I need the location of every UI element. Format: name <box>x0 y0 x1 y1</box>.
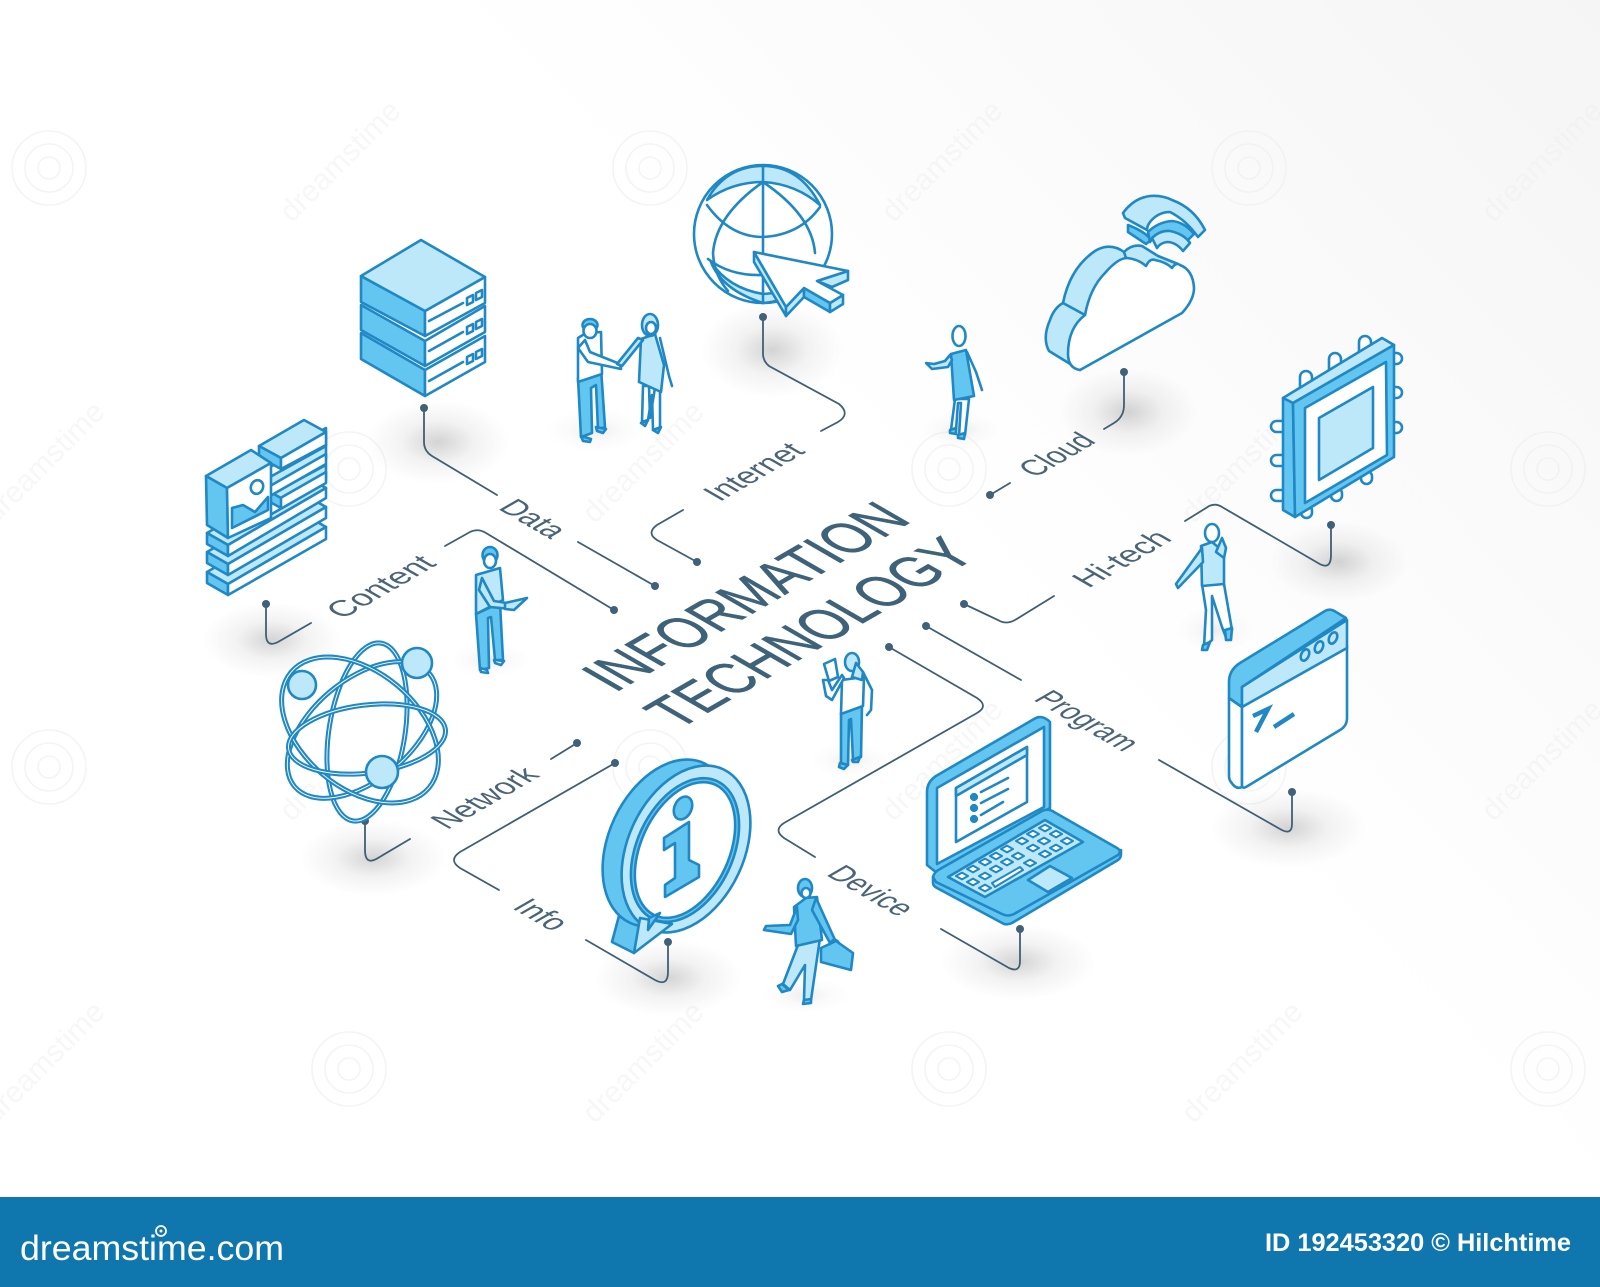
person: woman reading phone <box>823 653 872 769</box>
text: dreamstime <box>273 693 407 827</box>
picture block <box>206 450 271 538</box>
text: dreamstime <box>875 94 1009 228</box>
icon: network atom <box>254 628 466 832</box>
connector: Data <box>420 404 659 590</box>
text: dreamstime <box>875 693 1009 827</box>
connector: Hi-tech <box>960 505 1335 622</box>
wifi waves <box>1123 196 1205 251</box>
person: man shaking hands <box>578 319 621 442</box>
top unit <box>361 240 485 336</box>
title line 2: TECHNOLOGY <box>630 529 991 737</box>
label: Cloud: Cloud <box>1010 427 1103 482</box>
label: Device: Device <box>819 860 924 921</box>
top row <box>207 476 326 556</box>
text block <box>259 420 326 469</box>
pins <box>1271 336 1402 518</box>
base <box>933 810 1121 924</box>
label: Info: Info <box>505 893 578 936</box>
person: man with briefcase <box>764 879 853 1004</box>
window face <box>1242 646 1347 788</box>
person: man on the phone <box>1176 524 1232 650</box>
connector: Network <box>361 739 581 861</box>
window side <box>1229 698 1242 788</box>
footer logo: dreamstime.com <box>20 1229 284 1268</box>
label: Network: Network <box>422 761 548 834</box>
touchpad <box>1028 866 1072 892</box>
footer bar <box>0 1197 1600 1287</box>
bubble back <box>577 739 757 947</box>
middle row <box>207 495 326 575</box>
icon: content page <box>206 420 326 595</box>
title bar <box>1242 620 1347 707</box>
keyboard <box>948 820 1083 897</box>
person: man with tablet <box>476 547 527 673</box>
window frame top <box>1229 610 1346 707</box>
text: dreamstime <box>576 395 710 529</box>
middle unit <box>361 305 485 366</box>
icon: server <box>361 240 485 396</box>
command prompt <box>1253 709 1294 732</box>
bubble tail <box>612 912 649 953</box>
connector: Program <box>922 622 1296 832</box>
bottom unit <box>361 333 485 396</box>
title line 1: INFORMATION <box>567 493 925 700</box>
label: Hi-tech: Hi-tech <box>1063 525 1179 592</box>
text: dreamstime <box>1175 395 1309 529</box>
connector: Internet <box>652 313 845 566</box>
connector: Device <box>778 643 1024 969</box>
text: dreamstime <box>1175 995 1309 1129</box>
person: woman shaking hands <box>617 314 672 433</box>
icon: laptop <box>927 717 1121 924</box>
icon: info bubble <box>577 739 776 953</box>
label: Data: Data <box>491 494 576 543</box>
icon: program window <box>1229 610 1347 788</box>
footer credit: ID 192453320 © Hilchtime <box>1265 1229 1571 1257</box>
connector: Info <box>454 759 672 982</box>
label: Content: Content <box>317 550 444 623</box>
icon: microchip <box>1271 336 1402 518</box>
nodes <box>288 648 432 788</box>
connector: Cloud <box>986 368 1128 499</box>
cursor <box>754 252 848 316</box>
cloud body <box>1046 246 1194 370</box>
title <box>567 493 991 737</box>
window buttons <box>1299 631 1339 662</box>
text: dreamstime <box>273 94 407 228</box>
person: woman gesturing <box>926 326 982 439</box>
text: dreamstime <box>576 995 710 1129</box>
connector: Content <box>262 530 618 644</box>
chip body <box>1283 338 1394 517</box>
label: Internet: Internet <box>695 437 812 506</box>
globe <box>694 165 832 303</box>
orbit rings <box>254 628 466 832</box>
bottom row <box>207 515 326 595</box>
label: Program: Program <box>1026 685 1149 756</box>
lid <box>927 717 1050 873</box>
letter i <box>664 794 699 897</box>
keys <box>956 825 1073 891</box>
icon: internet globe with cursor <box>694 165 848 316</box>
icon: cloud with wifi <box>1046 196 1205 370</box>
bubble front ring <box>596 745 776 953</box>
text rows <box>270 428 326 515</box>
